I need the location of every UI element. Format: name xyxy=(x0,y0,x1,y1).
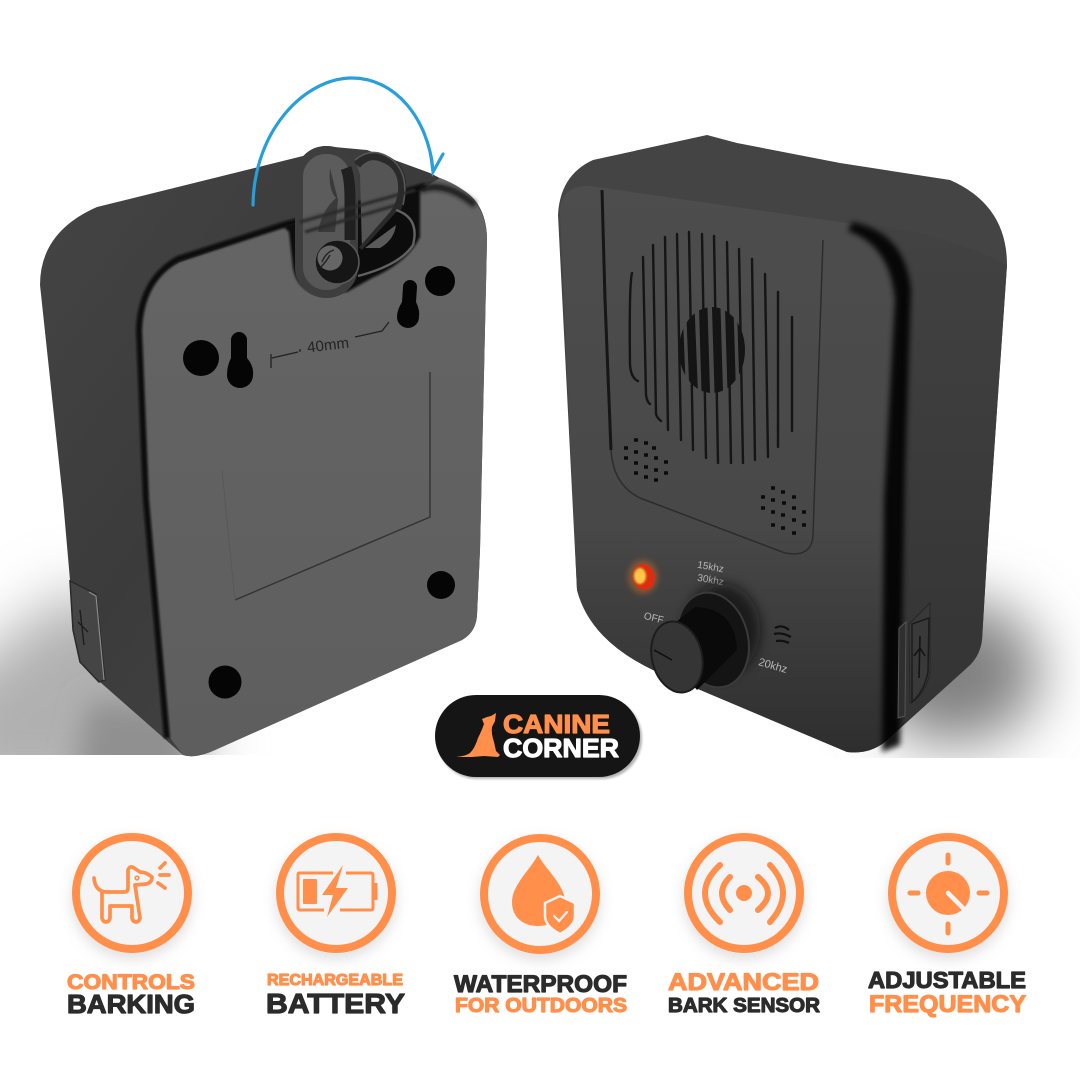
label: ADVANCED xyxy=(668,969,819,996)
LED indicator xyxy=(628,560,658,594)
icon: signal waves xyxy=(705,865,783,922)
badge circle xyxy=(688,837,800,949)
logo badge xyxy=(435,695,642,779)
logo wordmark: CANINE xyxy=(503,709,610,739)
rotation arrow xyxy=(253,78,443,205)
icon: dial xyxy=(910,855,987,933)
speaker centre xyxy=(680,307,745,393)
label xyxy=(668,969,821,1017)
device: front view with speaker xyxy=(558,135,1007,752)
40mm dimension xyxy=(271,322,389,368)
feature: waterproof xyxy=(454,838,627,1017)
USB port cover xyxy=(70,581,105,682)
label xyxy=(67,971,195,1019)
label: FOR OUTDOORS xyxy=(455,995,627,1017)
speaker panel xyxy=(602,190,823,554)
sound grille: left xyxy=(624,440,668,480)
vent slots xyxy=(774,626,791,643)
rear device body xyxy=(40,146,487,756)
device: rear view with mounting bracket xyxy=(40,146,487,756)
icon: charging battery xyxy=(298,865,376,917)
rim shadow xyxy=(848,222,911,752)
feature: advanced bark sensor xyxy=(668,837,821,1017)
mounting bracket xyxy=(283,150,420,294)
icon: water drop with shield xyxy=(512,855,575,934)
rear device front face xyxy=(140,178,487,756)
icon: sitting dog xyxy=(456,713,500,757)
label xyxy=(266,972,405,1019)
badge circle xyxy=(892,837,1004,949)
logo wordmark: CORNER xyxy=(503,733,619,763)
rim shadow xyxy=(139,186,425,738)
front device side xyxy=(880,225,1007,740)
feature: controls barking xyxy=(67,837,195,1019)
inset rectangle label area xyxy=(235,372,430,600)
frequency labels: 20khz xyxy=(757,656,789,676)
label: FREQUENCY xyxy=(869,991,1026,1018)
USB port cover xyxy=(898,603,930,718)
front device face xyxy=(560,186,903,752)
label: BATTERY xyxy=(266,988,405,1019)
speaker slots xyxy=(630,232,792,463)
icon: barking dog xyxy=(94,863,169,922)
logo wordmark xyxy=(503,709,619,763)
frequency labels: 15khz xyxy=(696,560,725,575)
label xyxy=(868,967,1026,1018)
label: CONTROLS xyxy=(67,971,195,994)
upright capsule xyxy=(299,150,354,294)
40mm dimension: 40mm xyxy=(306,335,350,356)
feature: rechargeable battery xyxy=(266,837,405,1019)
pivot ring xyxy=(315,240,359,284)
feature: adjustable frequency xyxy=(868,837,1026,1018)
front device body xyxy=(558,135,1007,752)
floor shadow: left device xyxy=(0,590,200,800)
badge circle xyxy=(280,837,392,949)
bracket shadow base xyxy=(283,189,420,293)
badge circle xyxy=(76,837,188,949)
badge circle xyxy=(484,838,596,950)
mounting holes xyxy=(183,266,455,698)
frequency labels xyxy=(643,560,789,676)
floor shadow: right device xyxy=(870,600,1040,744)
control knob xyxy=(644,584,760,698)
frequency labels: 30khz xyxy=(696,573,725,588)
label: BARK SENSOR xyxy=(668,995,821,1017)
crease lines xyxy=(300,190,415,232)
label: ADJUSTABLE xyxy=(868,967,1026,993)
lower loop xyxy=(358,210,414,270)
label: BARKING xyxy=(67,989,195,1019)
label: RECHARGEABLE xyxy=(267,972,403,989)
rear loop xyxy=(356,156,403,252)
label xyxy=(454,971,627,1017)
sound grille: right xyxy=(761,488,806,533)
frequency labels: OFF xyxy=(643,611,665,626)
label: WATERPROOF xyxy=(454,971,627,998)
